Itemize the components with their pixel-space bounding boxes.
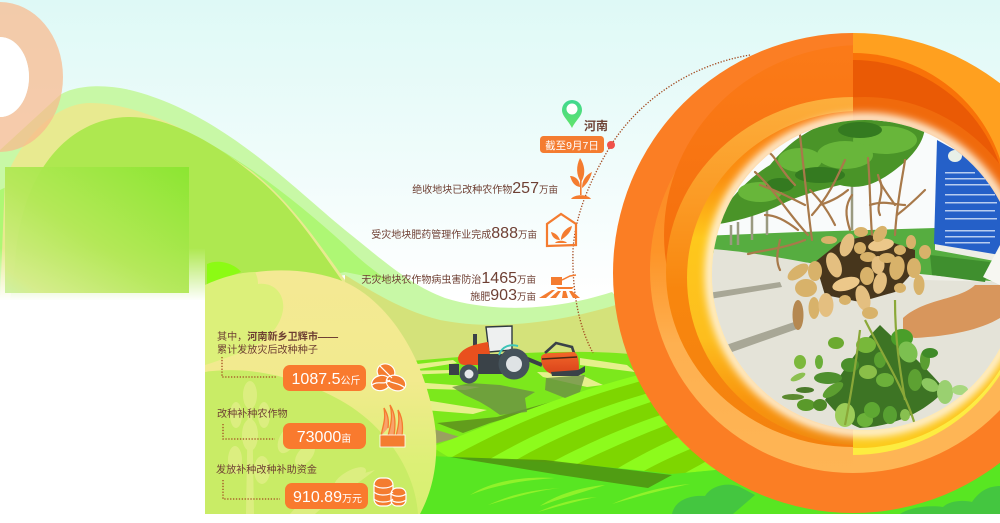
grille bbox=[449, 364, 459, 375]
label: subsidy funds: 发放补种改种补助资金 bbox=[216, 463, 317, 476]
value pill: crops: 73000亩 bbox=[297, 429, 351, 446]
small wheel bbox=[460, 364, 478, 384]
shirt bbox=[983, 245, 1000, 285]
roots bbox=[748, 135, 925, 270]
trees bbox=[712, 118, 925, 225]
peanuts bbox=[785, 223, 931, 330]
lime blob bbox=[205, 272, 283, 365]
stat: affected plots fertilizer management: 受灾地块肥药管理作业完成888万亩 bbox=[371, 225, 537, 242]
icon: coins bbox=[374, 478, 406, 506]
tree trunks bbox=[730, 186, 854, 245]
connector 2 bbox=[223, 424, 275, 439]
stat: unaffected plots pest control: 无灾地块农作物病虫害防治1465万亩 bbox=[361, 270, 536, 287]
dotted timeline curve bbox=[573, 55, 750, 353]
ring: left half bbox=[613, 33, 853, 513]
label: seeds distributed: 累计发放灾后改种种子 bbox=[217, 343, 318, 356]
icon: crops in soil bbox=[380, 405, 405, 447]
connector 1 bbox=[222, 357, 277, 377]
date badge bbox=[540, 136, 604, 153]
trailer base bbox=[551, 366, 585, 376]
timeline red dot bbox=[607, 141, 615, 149]
subheading: Weihui city: 其中，河南新乡卫辉市—— bbox=[217, 330, 339, 343]
value pill: seeds bbox=[283, 365, 366, 391]
distant field bbox=[700, 228, 1000, 282]
trailer stripe bbox=[542, 357, 577, 359]
ring: right lower bbox=[853, 348, 1000, 513]
connector 3 bbox=[223, 480, 280, 499]
tractor shadow bbox=[452, 375, 585, 415]
icon: greenhouse bbox=[547, 214, 576, 246]
value pill: funds: 910.89万元 bbox=[293, 489, 362, 506]
background sky bbox=[0, 0, 1000, 300]
white ground left of scene bbox=[0, 300, 205, 523]
peanut stems bbox=[845, 300, 915, 425]
value pill: crops bbox=[283, 423, 366, 449]
blue sign bbox=[934, 140, 1000, 255]
sign badge bbox=[948, 150, 962, 162]
wheat pale decoration bbox=[228, 381, 375, 514]
road bbox=[712, 249, 1000, 430]
peach ring top left bbox=[0, 2, 63, 152]
exhaust bbox=[473, 334, 477, 346]
orange ring bbox=[613, 33, 1000, 513]
leaves base bbox=[825, 325, 945, 428]
foreground green bbox=[432, 456, 716, 480]
lower field stripes bbox=[452, 380, 712, 476]
dark furrow shadow bbox=[450, 457, 672, 488]
background hills bbox=[0, 86, 640, 400]
date badge: 截至9月7日 bbox=[545, 139, 599, 152]
lower striped field bbox=[432, 372, 720, 474]
icon: beans bbox=[370, 361, 408, 393]
soft glow around photo bbox=[710, 118, 1000, 432]
photo: peanut plant bbox=[712, 120, 1000, 430]
photo sky bbox=[700, 120, 1000, 245]
road kerbs bbox=[708, 282, 800, 352]
tractor bbox=[449, 326, 585, 415]
yellow hill bbox=[205, 270, 436, 514]
ring: right upper bbox=[853, 33, 1000, 202]
foreground base bbox=[696, 470, 710, 472]
leaves bbox=[782, 329, 968, 427]
white inner hole of peach ring bbox=[0, 37, 29, 117]
trailer arch bbox=[545, 343, 574, 353]
dark soil behind peanuts bbox=[815, 235, 915, 302]
tractor hitch bbox=[525, 358, 542, 365]
engine dark bbox=[478, 354, 502, 374]
field stripes pale bbox=[400, 358, 635, 414]
lime lower area bbox=[205, 370, 418, 514]
label: replanted crops: 改种补种农作物 bbox=[217, 407, 288, 420]
location pin bbox=[562, 100, 582, 128]
cab bbox=[486, 326, 512, 352]
hedge bbox=[930, 255, 990, 282]
hood bbox=[458, 342, 503, 365]
field diagonal shadow bbox=[437, 402, 552, 433]
heading: Henan: 河南 bbox=[584, 119, 608, 133]
trailer body bbox=[541, 352, 579, 374]
green blob top bbox=[207, 262, 241, 285]
grey shadow patch bbox=[436, 430, 458, 444]
arm bbox=[903, 285, 1000, 338]
grass tufts bbox=[470, 478, 690, 512]
stat: harvest failed plots replanted: 绝收地块已改种农作物257万亩 bbox=[412, 180, 558, 197]
value pill: funds bbox=[285, 483, 368, 509]
value pill: seeds: 1087.5公斤 bbox=[292, 371, 360, 388]
teal fender bbox=[499, 345, 518, 355]
top field bbox=[416, 352, 694, 473]
tree shadows bbox=[766, 122, 882, 192]
icon: seedling bbox=[570, 158, 592, 199]
green rectangle block bbox=[5, 167, 189, 293]
foreground bushes bbox=[672, 485, 1000, 514]
tree highlights bbox=[738, 126, 917, 202]
stat: fertilizing: 施肥903万亩 bbox=[470, 287, 536, 304]
big wheel bbox=[498, 348, 530, 380]
icon: farm machine bbox=[539, 275, 580, 298]
scene: fields bbox=[205, 262, 1000, 523]
sign text lines bbox=[945, 172, 997, 244]
